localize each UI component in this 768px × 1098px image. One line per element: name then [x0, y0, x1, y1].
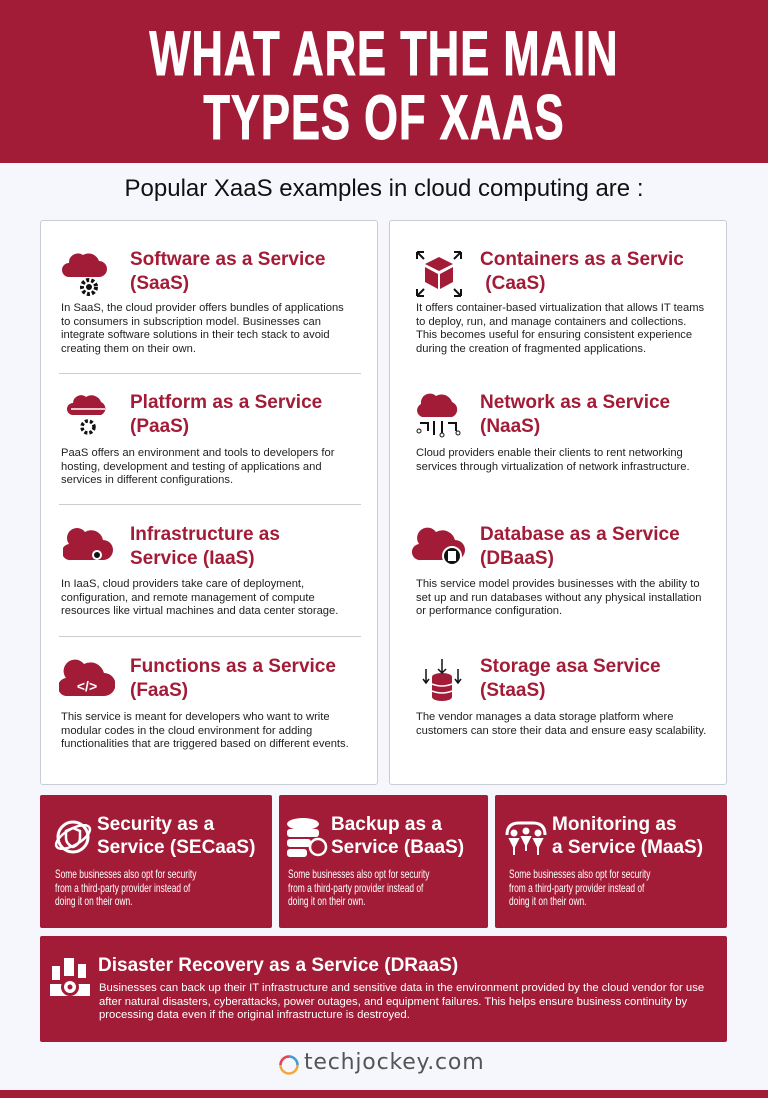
text: MaaS: Some businesses also opt for security	[509, 867, 650, 881]
text: FaaS: functionalities that are triggered based on different events.	[61, 738, 349, 750]
heading: MaaS: Monitoring as	[552, 814, 677, 835]
heading: SaaS	[130, 249, 325, 294]
text: PaaS: hosting, development and testing of applications and	[61, 460, 322, 472]
heading: FaaS	[130, 656, 336, 701]
text: PaaS: services in different configurations.	[61, 474, 233, 486]
text: NaaS: services through virtualization of network infrastructure.	[416, 460, 690, 472]
icon: FaaS cloud code	[59, 660, 115, 696]
heading: PaaS: (PaaS)	[130, 416, 189, 437]
heading: NaaS	[480, 392, 670, 437]
text: CaaS	[416, 302, 704, 354]
icon: FaaS cloud code: </>	[77, 678, 97, 694]
text: SaaS	[61, 302, 344, 354]
text: NaaS	[416, 447, 690, 472]
heading: FaaS: (FaaS)	[130, 680, 188, 701]
text: FaaS: This service is meant for developers who want to write	[61, 711, 330, 723]
text: DBaaS: or performance configuration.	[416, 605, 562, 617]
text: SaaS: integrate software solutions in their tech stack to avoid	[61, 329, 330, 341]
heading: SaaS: Software as a Service	[130, 249, 325, 270]
icon: CaaS box	[416, 251, 462, 297]
text: FaaS	[61, 711, 349, 750]
box: MaaS	[495, 795, 727, 928]
text: PaaS: PaaS offers an environment and tools to developers for	[61, 447, 334, 459]
heading: NaaS: Network as a Service	[480, 392, 670, 413]
text: CaaS: It offers container-based virtualization that allows IT teams	[416, 302, 704, 314]
text: BaaS: from a third-party provider instead of	[288, 880, 423, 894]
box: DRaaS	[40, 936, 727, 1042]
icon: security	[54, 820, 92, 854]
heading: CaaS: (CaaS)	[485, 273, 545, 294]
icon: PaaS cloud gear	[67, 395, 106, 435]
text: IaaS: resources like virtual machines and data center storage.	[61, 605, 338, 617]
heading: PaaS	[130, 392, 322, 437]
text: SaaS: In SaaS, the cloud provider offers bundles of applications	[61, 302, 344, 314]
heading: SECaaS: Service (SECaaS)	[97, 837, 255, 858]
text: CaaS: to deploy, run, and manage containers and collections.	[416, 316, 686, 328]
footer bar	[0, 1090, 768, 1098]
heading: StaaS: Storage asa Service	[480, 656, 661, 677]
heading: IaaS	[130, 524, 280, 569]
text: SaaS: to consumers in subscription model. Businesses can	[61, 316, 321, 328]
text: NaaS: Cloud providers enable their clients to rent networking	[416, 447, 683, 459]
text: SECaaS	[55, 867, 196, 908]
heading: NaaS: (NaaS)	[480, 416, 540, 437]
text: MaaS	[509, 867, 650, 908]
subtitle: Popular XaaS examples in cloud computing are :	[125, 175, 643, 202]
text: CaaS: This becomes useful for ensuring consistent experience	[416, 329, 692, 341]
text: PaaS	[61, 447, 334, 486]
icon: disaster recovery	[50, 958, 90, 996]
text: BaaS: doing it on their own.	[288, 894, 366, 908]
heading: PaaS: Platform as a Service	[130, 392, 322, 413]
text: StaaS	[416, 711, 706, 736]
logo text: techjockey.com	[304, 1050, 484, 1075]
heading: SECaaS: Security as a	[97, 814, 214, 835]
heading: MaaS: a Service (MaaS)	[552, 837, 703, 858]
icon: IaaS cloud server	[63, 528, 113, 560]
heading: DRaaS: Disaster Recovery as a Service (DRaaS)	[98, 955, 458, 976]
heading: MaaS	[552, 814, 703, 858]
panel: left column	[40, 220, 378, 785]
text: DBaaS: set up and run databases without any physical installation	[416, 592, 701, 604]
icon: monitoring	[506, 822, 546, 855]
panel: right column	[389, 220, 727, 785]
text: DBaaS: This service model provides businesses with the ability to	[416, 578, 700, 590]
heading: CaaS: Containers as a Servic	[480, 249, 684, 270]
box: BaaS	[279, 795, 488, 928]
text: IaaS: configuration, and remote management of compute	[61, 592, 315, 604]
heading: StaaS	[480, 656, 661, 701]
heading: DBaaS: (DBaaS)	[480, 548, 554, 569]
title	[149, 19, 619, 153]
heading: BaaS	[331, 814, 464, 858]
heading: StaaS: (StaaS)	[480, 680, 545, 701]
box: SECaaS	[40, 795, 272, 928]
text: BaaS	[288, 867, 430, 908]
text: DBaaS	[416, 578, 701, 617]
title: TYPES OF XAAS	[203, 83, 565, 153]
heading: SaaS: (SaaS)	[130, 273, 189, 294]
text: DRaaS: processing data even if the original infrastructure is destroyed.	[99, 1009, 410, 1021]
text: StaaS: customers can store their data and ensure easy scalability.	[416, 724, 706, 736]
text: MaaS: from a third-party provider instead of	[509, 880, 644, 894]
text: FaaS: modular codes in the cloud environment for adding	[61, 724, 312, 736]
text: DRaaS	[99, 982, 704, 1021]
heading: BaaS: Service (BaaS)	[331, 837, 464, 858]
heading: SECaaS	[97, 814, 255, 858]
text: IaaS	[61, 578, 338, 617]
heading: CaaS	[480, 249, 684, 294]
text: SaaS: creating them on their own.	[61, 342, 196, 354]
logo: techjockey	[279, 1050, 484, 1075]
text: DRaaS: Businesses can back up their IT infrastructure and sensitive data in the environment provided by the cloud vendor for use	[99, 982, 704, 994]
heading: IaaS: Service (IaaS)	[130, 548, 255, 569]
heading: FaaS: Functions as a Service	[130, 656, 336, 677]
text: SECaaS: Some businesses also opt for security	[55, 867, 196, 881]
icon: backup	[287, 818, 328, 857]
icon: DBaaS cloud db	[412, 528, 465, 564]
text: SECaaS: from a third-party provider instead of	[55, 880, 190, 894]
text: SECaaS: doing it on their own.	[55, 894, 133, 908]
heading: IaaS: Infrastructure as	[130, 524, 280, 545]
icon: SaaS cloud gear	[62, 253, 107, 296]
text: StaaS: The vendor manages a data storage platform where	[416, 711, 673, 723]
text: BaaS: Some businesses also opt for security	[288, 867, 429, 881]
text: DRaaS: after natural disasters, cyberattacks, power outages, and equipment failures. This helps ensure business continuity by	[99, 996, 687, 1008]
text: MaaS: doing it on their own.	[509, 894, 587, 908]
text: CaaS: during the creation of fragmented applications.	[416, 342, 646, 354]
title: WHAT ARE THE MAIN	[149, 19, 619, 89]
heading: BaaS: Backup as a	[331, 814, 442, 835]
heading: DBaaS	[480, 524, 680, 569]
icon: logo mark	[279, 1055, 299, 1075]
icon: StaaS storage	[422, 659, 462, 701]
heading: DBaaS: Database as a Service	[480, 524, 680, 545]
header banner	[0, 0, 768, 163]
text: IaaS: In IaaS, cloud providers take care of deployment,	[61, 578, 304, 590]
icon: NaaS cloud network	[416, 394, 460, 438]
